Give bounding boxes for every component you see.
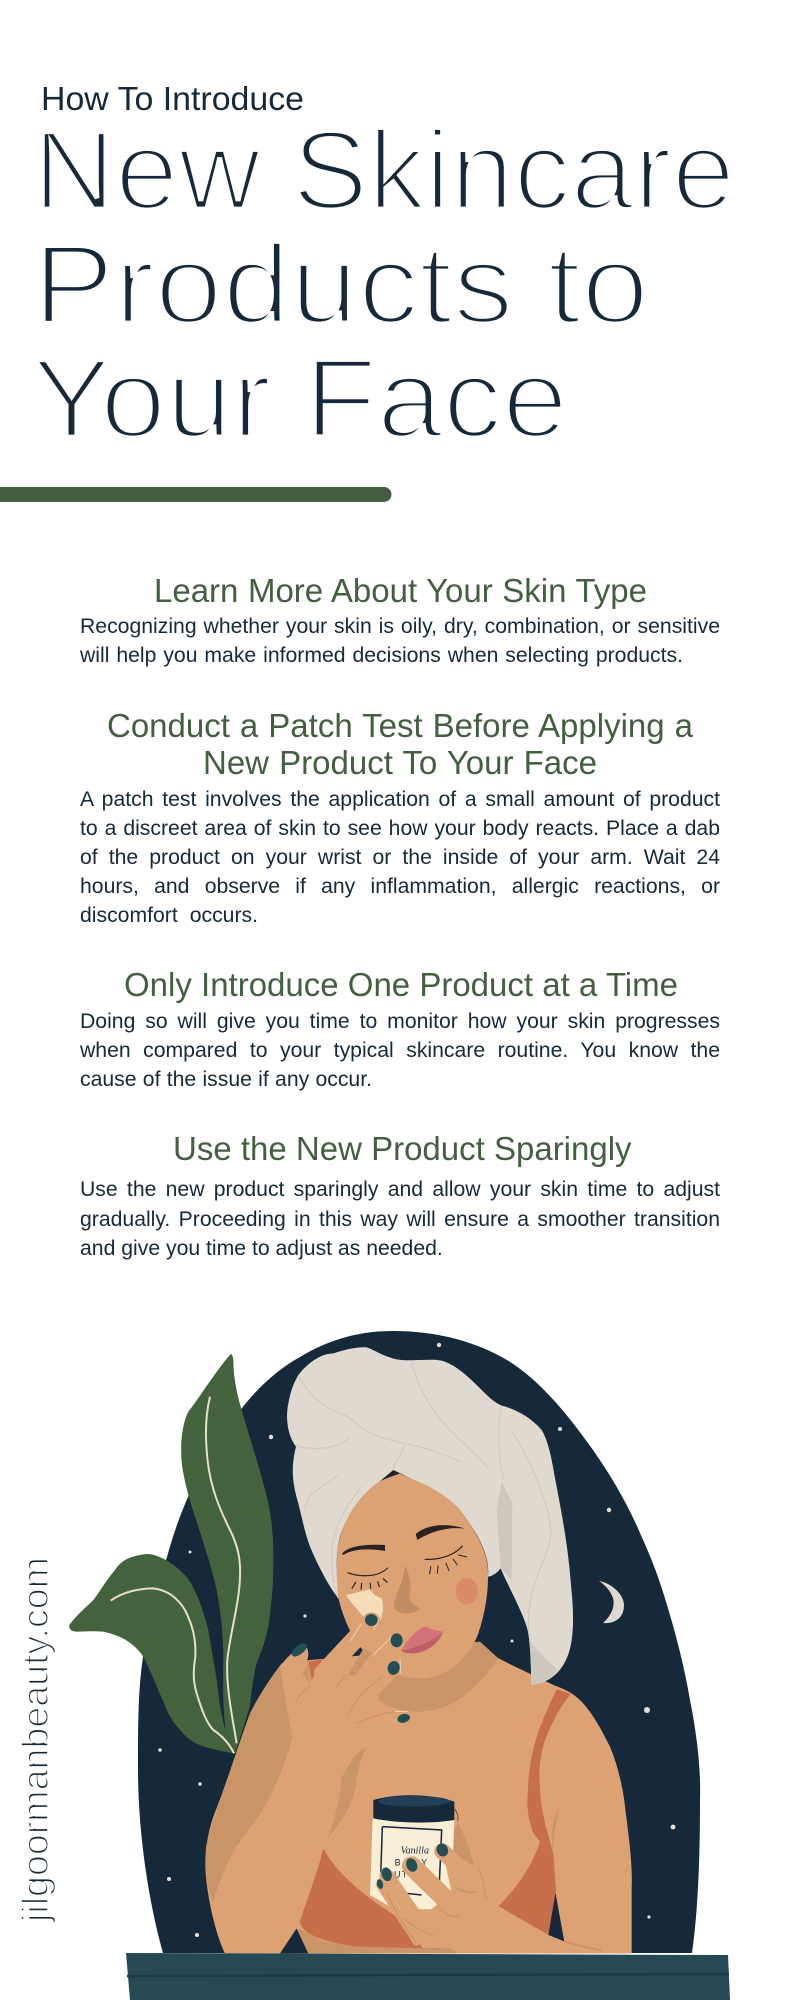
short leaf bbox=[69, 1554, 235, 1753]
intro line: How To Introduce bbox=[41, 80, 304, 117]
tall leaf bbox=[181, 1354, 273, 1753]
eyebrows bbox=[342, 1525, 465, 1555]
heading: Only Introduce One Product at a Time bbox=[124, 966, 678, 1003]
section: learn more about your skin type bbox=[80, 572, 720, 667]
face bbox=[337, 1473, 488, 1679]
lips bbox=[401, 1627, 443, 1653]
green accent bar bbox=[0, 487, 392, 502]
heading: New Product To Your Face bbox=[203, 744, 597, 781]
body text: Doing so will give you time to monitor how your skin progresses bbox=[80, 1010, 720, 1033]
bra left cup bbox=[300, 1848, 423, 1948]
jar: BUTTER bbox=[387, 1869, 431, 1879]
body text: of the product on your wrist or the inside of your arm. Wait 24 bbox=[80, 846, 720, 869]
body text bbox=[80, 615, 720, 667]
vertical site url: jilgoormanbeauty.com bbox=[15, 1557, 56, 1923]
upper hand bbox=[280, 1614, 411, 1775]
body text: discomfort occurs. bbox=[80, 904, 258, 927]
dark arch background bbox=[138, 1331, 700, 1953]
under-bust shade bbox=[297, 1928, 457, 1953]
nose bbox=[394, 1565, 420, 1613]
moon bbox=[599, 1581, 624, 1623]
woman: torso bbox=[205, 1642, 632, 1953]
blush bbox=[456, 1578, 478, 1605]
main title: Products to bbox=[33, 222, 649, 347]
body text: A patch test involves the application of a small amount of product bbox=[80, 788, 720, 811]
chest shade bbox=[327, 1747, 367, 1838]
stars bbox=[158, 1343, 675, 1937]
upper arm shade bbox=[206, 1663, 293, 1903]
cream on cheek bbox=[346, 1589, 383, 1630]
heading: Conduct a Patch Test Before Applying a bbox=[107, 707, 693, 744]
neck shade bbox=[378, 1642, 498, 1712]
bra right cup bbox=[498, 1842, 556, 1935]
shade behind jar bbox=[443, 1823, 474, 1867]
body text bbox=[80, 1010, 720, 1091]
body text bbox=[80, 1178, 720, 1260]
table bbox=[126, 1953, 730, 2000]
jar: BODY bbox=[395, 1857, 429, 1867]
body text: cause of the issue if any occur. bbox=[80, 1068, 372, 1091]
hairline bbox=[379, 1465, 411, 1482]
gaps between arms and torso bbox=[280, 1928, 308, 1953]
body text: Use the new product sparingly and allow your skin time to adjust bbox=[80, 1178, 720, 1201]
body text: gradually. Proceeding in this way will ensure a smoother transition bbox=[80, 1208, 720, 1231]
section: conduct a patch test bbox=[80, 707, 720, 927]
main title: Your Face bbox=[32, 336, 568, 461]
nails upper hand bbox=[290, 1614, 411, 1724]
skin base bbox=[205, 1645, 632, 1953]
eyes and lashes bbox=[348, 1546, 467, 1589]
body text: and give you time to adjust as needed. bbox=[80, 1237, 443, 1260]
body text: when compared to your typical skincare routine. You know the bbox=[80, 1039, 720, 1062]
section: use the new product sparingly bbox=[80, 1130, 720, 1260]
main title: New Skincare bbox=[33, 108, 735, 233]
section: only introduce one product bbox=[80, 966, 720, 1091]
arm crease bbox=[552, 1805, 560, 1850]
main title bbox=[32, 108, 735, 461]
body text bbox=[80, 788, 720, 927]
jar bbox=[370, 1795, 458, 1909]
jar: Vanilla bbox=[401, 1845, 429, 1856]
plant bbox=[69, 1354, 273, 1753]
body text: to a discreet area of skin to see how your body reacts. Place a dab bbox=[80, 817, 720, 840]
body text: Recognizing whether your skin is oily, dry, combination, or sensitive bbox=[80, 615, 720, 638]
towel bbox=[287, 1347, 573, 1685]
heading bbox=[107, 707, 693, 781]
heading: Use the New Product Sparingly bbox=[173, 1130, 632, 1167]
woman: hands and jar bbox=[280, 1614, 632, 1953]
woman: head bbox=[287, 1347, 573, 1685]
bra strap bbox=[527, 1689, 571, 1853]
body text: will help you make informed decisions when selecting products. bbox=[80, 644, 683, 667]
body text: hours, and observe if any inflammation, allergic reactions, or bbox=[80, 875, 720, 898]
heading: Learn More About Your Skin Type bbox=[154, 572, 647, 609]
lower hand bbox=[376, 1842, 632, 1953]
